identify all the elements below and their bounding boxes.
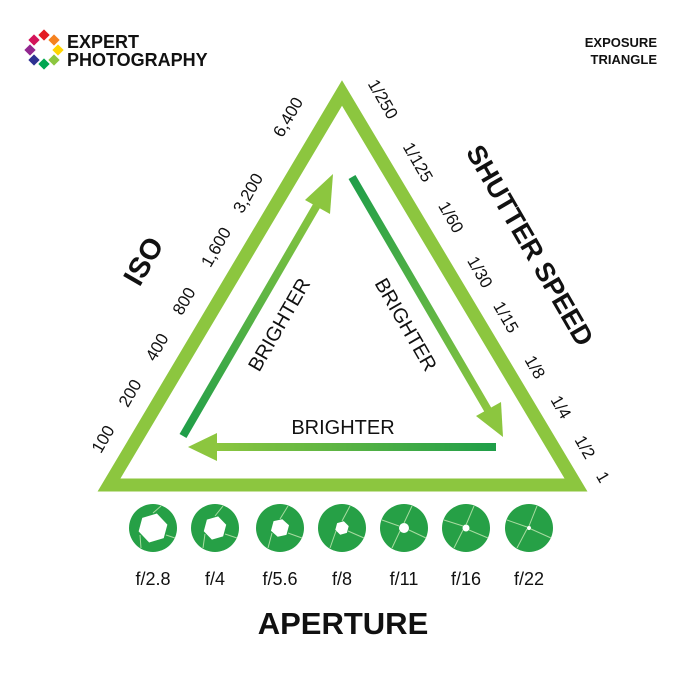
shutter values [364, 76, 613, 486]
shutter values: 1/30 [463, 253, 496, 291]
ISO values: 400 [142, 330, 173, 364]
ISO values: 1,600 [197, 224, 235, 270]
heading: ISO: ISO [118, 232, 171, 291]
shutter values: 1/250 [364, 76, 402, 122]
ISO values: 200 [115, 376, 146, 410]
arrow: left brighter [183, 174, 333, 436]
arrow: bottom brighter [188, 433, 496, 461]
aperture values: f/11 [390, 569, 418, 589]
ISO values: 6,400 [269, 94, 307, 140]
logo text: EXPERT [67, 32, 139, 52]
shutter values: 1/60 [434, 198, 467, 236]
title: exposure triangle: TRIANGLE [591, 52, 657, 67]
outer triangle [109, 93, 576, 485]
ISO values: 100 [88, 422, 119, 456]
aperture values: f/22 [514, 569, 544, 589]
icon: logo ring [24, 29, 64, 70]
aperture values: f/2.8 [135, 569, 171, 589]
shutter values: 1 [592, 468, 613, 486]
ISO values: 800 [169, 284, 200, 318]
shutter values: 1/2 [571, 432, 599, 462]
shutter values: 1/15 [489, 298, 522, 336]
label: brighter bottom: BRIGHTER [291, 417, 395, 439]
logo [24, 29, 208, 70]
aperture values: f/4 [205, 569, 225, 589]
ISO values: 3,200 [229, 170, 267, 216]
heading: shutter speed: SHUTTER SPEED [460, 140, 599, 351]
ISO values [88, 94, 307, 456]
arrow: right brighter [352, 177, 503, 437]
aperture values: f/16 [451, 569, 481, 589]
aperture icons [129, 504, 553, 552]
label: brighter left: BRIGHTER [244, 275, 315, 375]
shutter values: 1/8 [521, 352, 549, 382]
aperture values [135, 569, 544, 589]
label: brighter right: BRIGHTER [370, 275, 441, 375]
aperture values: f/5.6 [262, 569, 298, 589]
title: exposure triangle: EXPOSURE [585, 35, 657, 50]
aperture values: f/8 [332, 569, 352, 589]
shutter values: 1/125 [399, 139, 437, 185]
logo: PHOTOGRAPHY [67, 50, 208, 70]
heading: aperture: APERTURE [258, 606, 428, 641]
title: exposure triangle [585, 35, 657, 67]
shutter values: 1/4 [547, 392, 575, 422]
